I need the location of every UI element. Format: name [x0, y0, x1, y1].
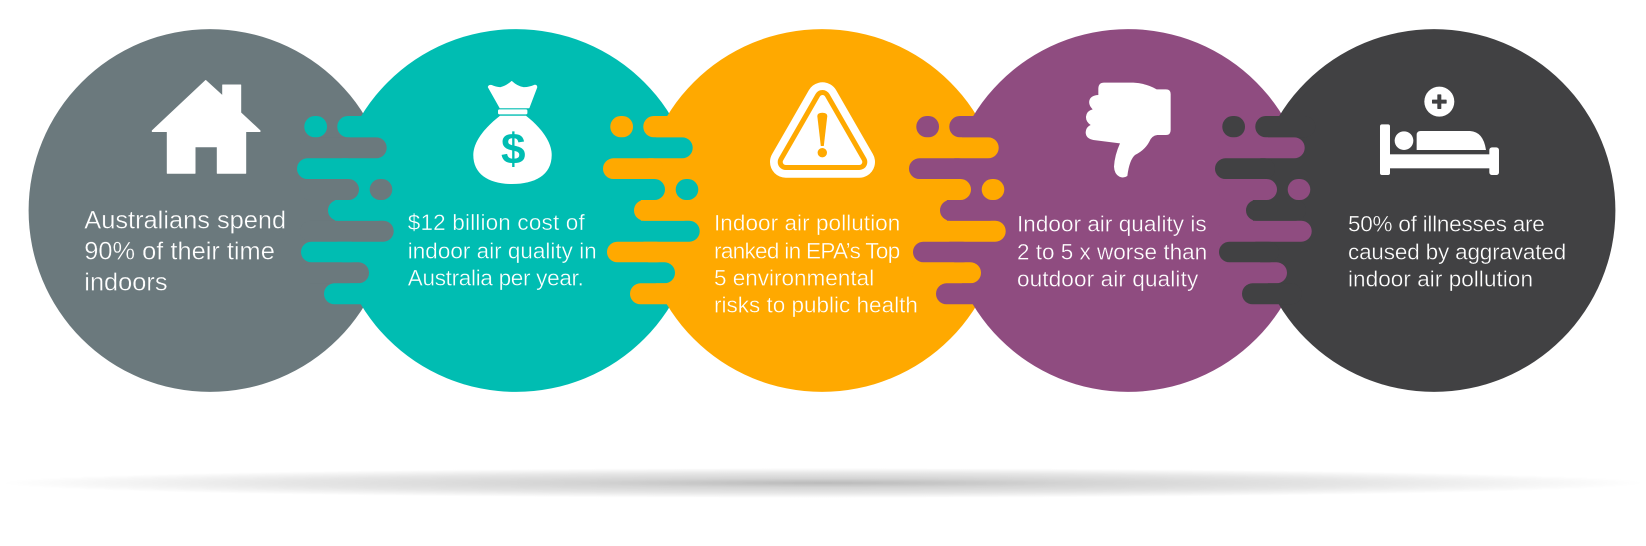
text: time indoors: 90% of their time [84, 238, 275, 266]
text: time indoors: Australians spend [84, 206, 286, 234]
text: cost [408, 210, 597, 291]
icon: warning triangle [786, 98, 859, 162]
text: illnesses: 50% of illnesses are [1348, 212, 1545, 237]
panel: outdoor comparison [947, 29, 1309, 392]
text: outdoor comparison [1017, 212, 1207, 292]
icon: money bag [473, 82, 552, 184]
text: EPA risk: 5 environmental [714, 266, 874, 291]
connector: orange to purple [909, 116, 1009, 304]
text: outdoor comparison: outdoor air quality [1017, 267, 1199, 292]
connector: teal to orange [603, 116, 703, 304]
text: illnesses [1348, 212, 1566, 292]
text: EPA risk [714, 211, 918, 318]
text: EPA risk: risks to public health [714, 293, 918, 318]
text: cost: $12 billion cost of [408, 210, 585, 235]
text: cost: Australia per year. [408, 266, 583, 291]
text: cost: indoor air quality in [408, 238, 597, 263]
panel: illnesses [1253, 29, 1615, 392]
icon: patient in bed [1380, 87, 1499, 175]
text: time indoors: indoors [84, 268, 168, 296]
text: illnesses: caused by aggravated [1348, 239, 1566, 264]
icon: house [152, 80, 260, 173]
connector: grey to teal [297, 116, 397, 304]
connector: purple to dark [1215, 116, 1315, 304]
icon: money bag: $ [501, 125, 526, 174]
panel: Australians indoors [29, 29, 391, 392]
text: EPA risk: ranked in EPA’s Top [714, 238, 900, 263]
panel: cost [335, 29, 697, 392]
text: time indoors [84, 206, 286, 296]
panel: EPA risk [641, 29, 1003, 392]
text: outdoor comparison: 2 to 5 x worse than [1017, 239, 1207, 264]
text: illnesses: indoor air pollution [1348, 267, 1533, 292]
icon: thumbs down [1086, 83, 1171, 178]
text: outdoor comparison: Indoor air quality is [1017, 212, 1207, 237]
ground shadow [0, 468, 1646, 498]
text: EPA risk: Indoor air pollution [714, 211, 900, 236]
